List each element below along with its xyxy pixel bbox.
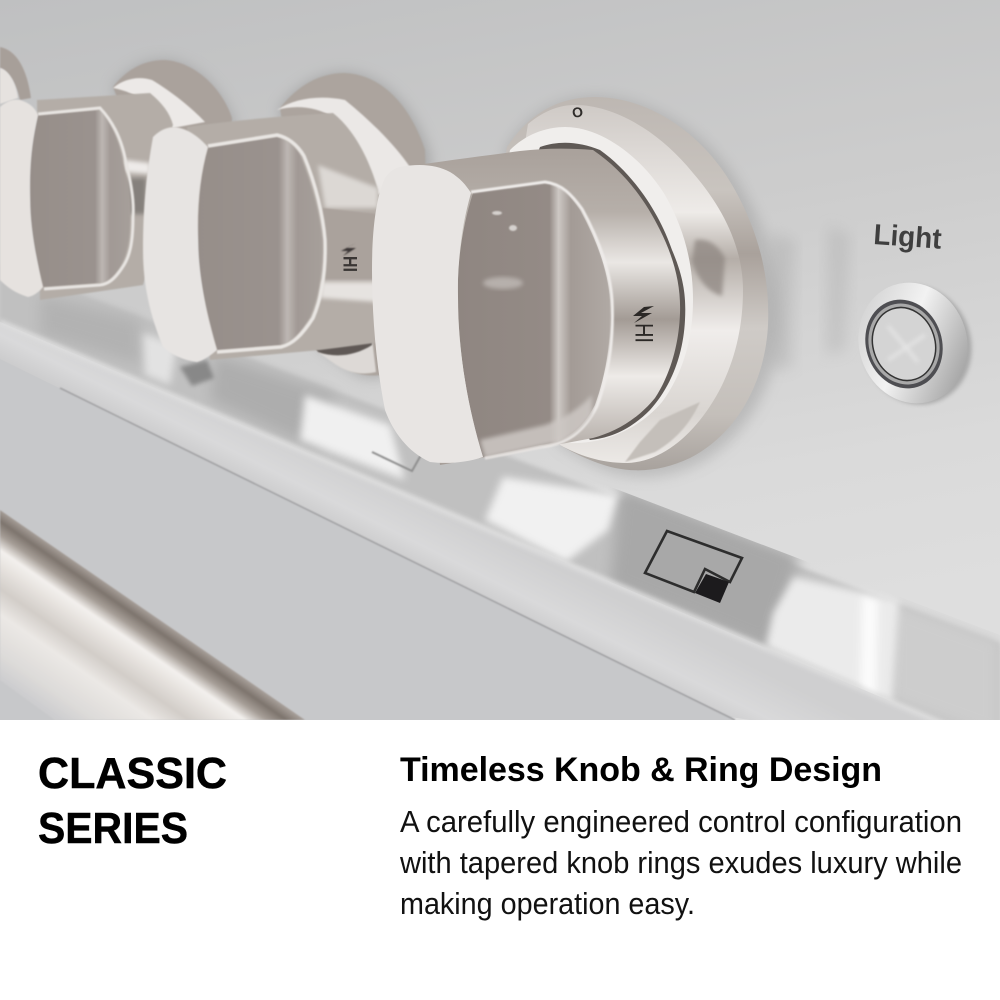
HI marking <box>633 306 654 342</box>
body text: making operation easy. <box>400 886 695 921</box>
dark gap <box>539 142 686 440</box>
inset grip <box>458 183 610 457</box>
heading: Timeless Knob & Ring Design: Timeless Knob & Ring Design <box>400 751 882 789</box>
light push button <box>860 282 974 406</box>
HI marking: IH <box>341 256 362 272</box>
inset grip <box>198 137 322 350</box>
panel icon fragments <box>180 360 214 386</box>
outer tapered ring <box>280 73 430 376</box>
body text: A carefully engineered control configuration <box>400 804 962 839</box>
lower oven door panel <box>0 359 735 720</box>
title: Classic Series: CLASSIC <box>38 749 227 798</box>
steel control panel background <box>0 0 1000 720</box>
inner ring bevel <box>526 105 743 463</box>
knob body <box>403 149 680 465</box>
concave reflective channel <box>0 263 1000 748</box>
knob 3: left knob <box>0 60 236 300</box>
panel: stainless steel range photo <box>0 0 1000 760</box>
white ring bevel <box>277 98 410 195</box>
knob body <box>187 113 382 360</box>
channel reflection highlights <box>485 477 618 562</box>
zero mark: O <box>571 103 584 121</box>
body text <box>399 804 962 921</box>
HI marking: IH <box>631 323 659 343</box>
body text: with tapered knob rings exudes luxury while <box>399 845 962 880</box>
light label: Light <box>873 219 943 256</box>
rounded lip strip <box>0 322 926 720</box>
HI marking <box>341 246 357 271</box>
title: Classic Series: SERIES <box>38 804 188 853</box>
oven door handle <box>0 510 305 720</box>
knob 4: cropped far-left ring <box>0 47 31 104</box>
knob 1: main foreground knob <box>372 97 778 477</box>
outer tapered ring <box>480 97 768 470</box>
knob 2: center knob <box>143 73 434 377</box>
white grip face <box>143 127 217 362</box>
icon: burner layout symbol <box>645 531 742 603</box>
white caption area <box>0 720 1000 1000</box>
title: Classic Series <box>38 749 227 853</box>
white grip face <box>372 165 483 463</box>
white inner lip <box>510 127 693 443</box>
